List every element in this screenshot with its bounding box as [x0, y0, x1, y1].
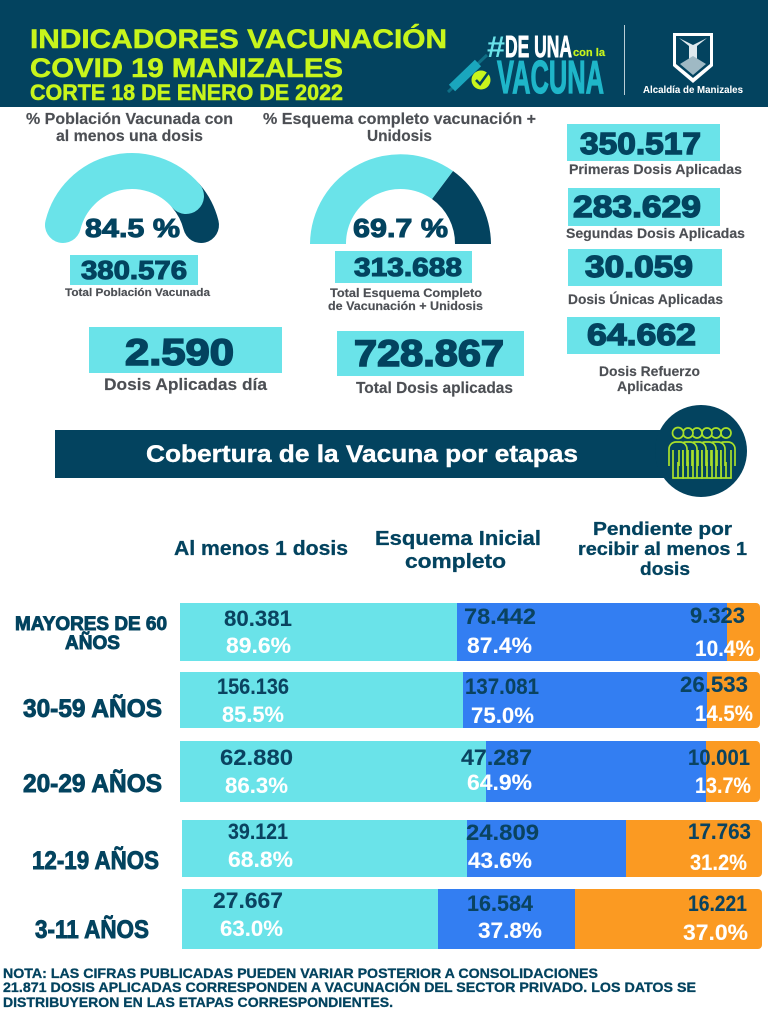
gauge: 69.7%: 69.7 % — [353, 213, 448, 243]
section banner: Cobertura de la Vacuna por etapas — [146, 441, 578, 468]
stat: dosis aplicadas día: Dosis Aplicadas día — [104, 376, 268, 394]
row: mayores de 60 años — [15, 603, 760, 661]
segment: pendiente: 37.0% — [683, 920, 748, 945]
logo divider — [624, 25, 625, 95]
segment: esquema inicial completo — [463, 672, 707, 728]
segment: pendiente: 10.001 — [688, 745, 750, 770]
heading: Unidosis — [367, 128, 432, 145]
column headers: Esquema Inicial — [375, 528, 541, 550]
title — [30, 23, 447, 105]
footnote: NOTA: LAS CIFRAS PUBLICADAS PUEDEN VARIAR POSTERIOR A CONSOLIDACIONES — [3, 966, 598, 981]
row label: MAYORES DE 60 — [15, 614, 167, 635]
icon: group of people — [669, 428, 735, 478]
segment: al menos 1 dosis: 89.6% — [226, 633, 291, 658]
row: 20-29 años — [23, 741, 760, 802]
segment: al menos 1 dosis: 62.880 — [220, 745, 293, 770]
logo: de una con la vacuna: DE UNA — [505, 29, 572, 64]
stat: segundas dosis: 283.629 — [573, 189, 701, 224]
stat: dosis refuerzo: 64.662 — [587, 317, 696, 352]
segment: al menos 1 dosis: 85.5% — [222, 702, 284, 727]
gauge: 69.7% — [310, 154, 491, 244]
stat: segundas dosis — [566, 188, 745, 241]
segment: al menos 1 dosis — [180, 741, 486, 802]
column headers: Al menos 1 dosis — [174, 538, 348, 560]
row label: 30-59 AÑOS — [23, 693, 162, 723]
segment: esquema inicial completo: 64.9% — [467, 770, 532, 795]
segment: al menos 1 dosis — [182, 819, 467, 877]
logo: de una con la vacuna: con la — [573, 47, 606, 59]
segment: al menos 1 dosis — [180, 672, 463, 728]
segment: pendiente — [575, 889, 762, 949]
segment: al menos 1 dosis: 27.667 — [213, 888, 283, 913]
panel: población vacunada — [26, 111, 233, 299]
stat: 313.688: de Vacunación + Unidosis — [328, 299, 483, 313]
segment: al menos 1 dosis: 156.136 — [217, 674, 289, 699]
segment: pendiente — [688, 741, 760, 802]
segment: pendiente: 10.4% — [695, 636, 754, 661]
segment: esquema inicial completo: 87.4% — [467, 633, 532, 658]
row: 12-19 años — [32, 819, 762, 877]
row: 3-11 años — [35, 888, 762, 949]
segment: al menos 1 dosis: 63.0% — [220, 916, 283, 941]
segment: al menos 1 dosis — [182, 888, 438, 949]
segment: pendiente: 14.5% — [695, 701, 753, 726]
segment: al menos 1 dosis: 86.3% — [225, 773, 288, 798]
column headers: recibir al menos 1 — [578, 539, 747, 559]
heading: % Población Vacunada con — [26, 111, 233, 128]
column headers — [174, 519, 747, 579]
stat: dosis aplicadas día — [89, 327, 282, 394]
segment: esquema inicial completo — [457, 603, 727, 661]
segment: al menos 1 dosis: 68.8% — [228, 847, 293, 872]
segment: pendiente: 16.221 — [688, 891, 747, 916]
segment: pendiente: 31.2% — [690, 850, 747, 875]
stat: dosis únicas: 30.059 — [585, 249, 693, 284]
logo: alcaldía de manizales: Alcaldía de Manizales — [643, 84, 743, 96]
title: INDICADORES VACUNACIÓN — [30, 23, 447, 54]
column headers: completo — [405, 551, 506, 573]
stat: 313.688: Total Esquema Completo — [330, 286, 482, 300]
segment: esquema inicial completo — [466, 820, 626, 877]
segment: al menos 1 dosis: 39.121 — [228, 819, 288, 844]
segment: al menos 1 dosis: 80.381 — [224, 606, 292, 631]
stat: 380.576 — [65, 255, 211, 299]
gauge: 84.5% — [63, 171, 201, 243]
panel: esquema completo — [263, 111, 536, 313]
header band — [0, 0, 768, 107]
logo: de una con la vacuna: # — [487, 31, 505, 64]
segment: pendiente — [690, 603, 760, 661]
stat: dosis únicas — [568, 249, 723, 307]
row label: AÑOS — [65, 632, 120, 654]
segment: esquema inicial completo: 47.287 — [461, 745, 532, 770]
stat: dosis aplicadas día: 2.590 — [125, 332, 234, 373]
stat: 380.576: 380.576 — [81, 255, 187, 285]
segment: pendiente: 13.7% — [695, 773, 751, 798]
stat: primeras dosis: 350.517 — [580, 126, 701, 161]
row label: 3-11 AÑOS — [35, 914, 149, 944]
segment: pendiente: 26.533 — [680, 672, 748, 697]
stat: total dosis aplicadas: 728.867 — [354, 333, 504, 374]
segment: esquema inicial completo — [461, 741, 706, 802]
segment: pendiente — [680, 672, 760, 728]
stat: segundas dosis: Segundas Dosis Aplicadas — [566, 226, 745, 241]
column headers: dosis — [640, 559, 690, 579]
title: CORTE 18 DE ENERO DE 2022 — [30, 80, 343, 105]
logo: de una con la vacuna: VACUNA — [497, 51, 604, 103]
segment: esquema inicial completo: 75.0% — [471, 703, 534, 728]
stat: dosis únicas: Dosis Únicas Aplicadas — [568, 292, 723, 307]
stat: primeras dosis: Primeras Dosis Aplicadas — [569, 162, 742, 177]
row label: 20-29 AÑOS — [23, 768, 162, 798]
stat: 313.688 — [328, 251, 483, 313]
segment: esquema inicial completo — [438, 889, 575, 949]
stat: total dosis aplicadas: Total Dosis aplicadas — [356, 380, 513, 397]
stat: total dosis aplicadas — [337, 331, 524, 397]
stat: dosis refuerzo: Aplicadas — [617, 379, 683, 394]
segment: esquema inicial completo: 37.8% — [478, 918, 542, 943]
footnote: DISTRIBUYERON EN LAS ETAPAS CORRESPONDIENTES. — [3, 995, 393, 1010]
logo: alcaldía de manizales — [643, 33, 743, 96]
footnote — [3, 966, 696, 1010]
segment: esquema inicial completo: 24.809 — [466, 820, 539, 845]
logo: de una con la vacuna — [448, 29, 606, 103]
stat: primeras dosis — [567, 124, 742, 177]
segment: esquema inicial completo: 78.442 — [464, 604, 536, 629]
heading — [263, 111, 536, 145]
heading: % Esquema completo vacunación + — [263, 111, 536, 128]
segment: esquema inicial completo: 137.081 — [465, 674, 539, 699]
gauge: 84.5%: 84.5 % — [85, 213, 180, 243]
segment: pendiente: 9.323 — [690, 603, 745, 628]
footnote: 21.871 DOSIS APLICADAS CORRESPONDEN A VACUNACIÓN DEL SECTOR PRIVADO. LOS DATOS SE — [3, 980, 696, 995]
title: COVID 19 MANIZALES — [30, 53, 343, 83]
stat: 380.576: Total Población Vacunada — [65, 287, 211, 299]
section banner — [55, 405, 747, 497]
segment: pendiente — [626, 819, 762, 877]
column headers: Pendiente por — [593, 519, 732, 539]
heading — [26, 111, 233, 145]
heading: al menos una dosis — [56, 128, 203, 145]
row: 30-59 años — [23, 672, 760, 728]
row label: 12-19 AÑOS — [32, 845, 159, 875]
row label — [15, 614, 167, 654]
segment: esquema inicial completo: 16.584 — [467, 891, 533, 916]
stat: dosis refuerzo — [567, 317, 720, 394]
stat: 313.688: 313.688 — [354, 252, 462, 282]
segment: al menos 1 dosis — [180, 603, 457, 661]
segment: esquema inicial completo: 43.6% — [468, 848, 532, 873]
stat: dosis refuerzo: Dosis Refuerzo — [599, 364, 700, 379]
segment: pendiente: 17.763 — [688, 819, 751, 844]
